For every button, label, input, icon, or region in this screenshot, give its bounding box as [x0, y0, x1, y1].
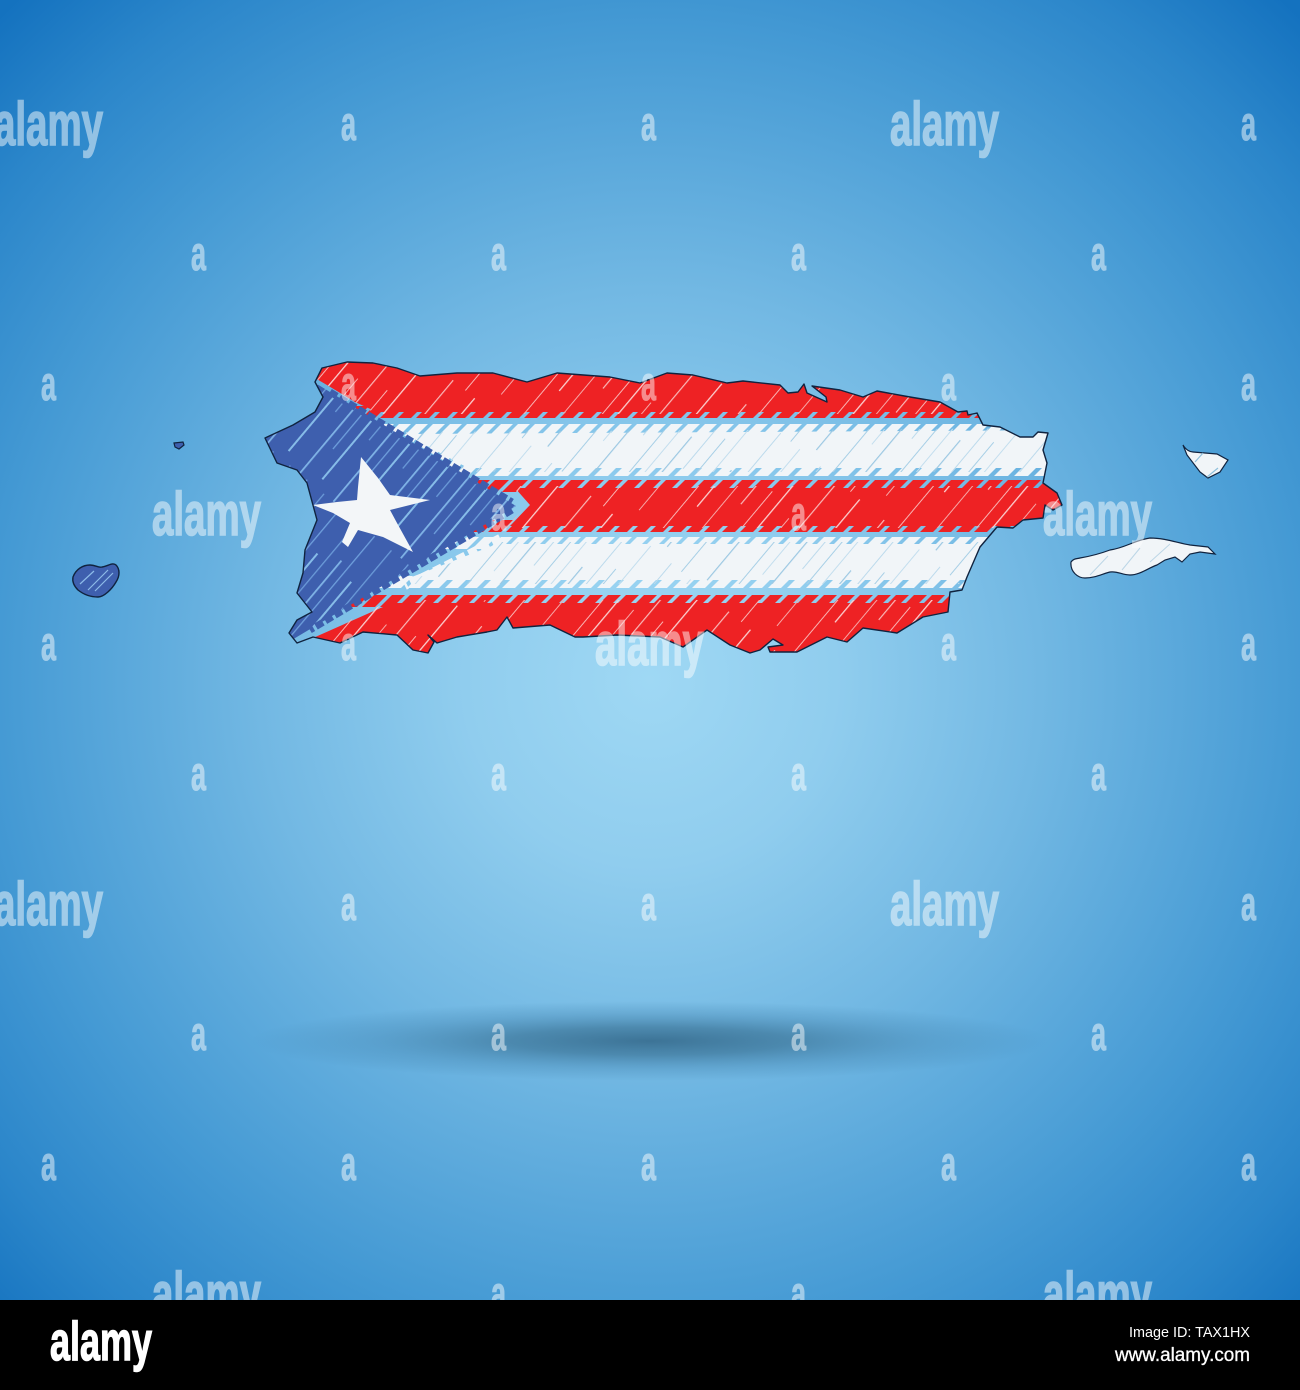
image id: Image ID: TAX1HX	[1129, 1324, 1250, 1341]
stock-photo watermark grid: a	[791, 228, 806, 281]
floating shadow below map	[250, 1001, 1050, 1081]
website: www.alamy.com	[1114, 1345, 1250, 1366]
Monito islet	[174, 442, 184, 449]
stock-photo watermark grid: a	[491, 228, 506, 281]
stock-photo watermark grid: a	[791, 1008, 806, 1061]
Vieques island	[1071, 538, 1215, 578]
stock-photo watermark grid: a	[1241, 878, 1256, 931]
stock-photo watermark grid: a	[1091, 748, 1106, 801]
stock-photo watermark grid: a	[341, 618, 356, 671]
stock-photo watermark grid: a	[1091, 228, 1106, 281]
map: main island of Puerto Rico with scribbled flag	[264, 361, 1063, 654]
stock-photo watermark grid: alamy	[1043, 1260, 1152, 1328]
stock-photo watermark grid: alamy	[595, 610, 704, 678]
stock-photo watermark grid: alamy	[152, 480, 261, 548]
stock-photo watermark grid: alamy	[890, 870, 999, 938]
stock-photo watermark grid: a	[41, 618, 56, 671]
Culebra island	[1183, 445, 1228, 478]
island outline	[265, 362, 1062, 653]
bottom red stripe	[316, 595, 949, 652]
stock-photo watermark grid: a	[191, 748, 206, 801]
stock-photo watermark grid: a	[491, 1008, 506, 1061]
stock-photo watermark grid: a	[341, 358, 356, 411]
stock-photo watermark grid: a	[641, 1138, 656, 1191]
stock-photo watermark grid: a	[1241, 618, 1256, 671]
stock-photo watermark grid: a	[1241, 1138, 1256, 1191]
stock-photo watermark grid: a	[791, 488, 806, 541]
stock-photo watermark grid: alamy	[890, 90, 999, 158]
stock-photo watermark grid: a	[1091, 1008, 1106, 1061]
stock-photo watermark grid: a	[791, 748, 806, 801]
stock-photo watermark grid: a	[941, 358, 956, 411]
stock-photo watermark grid: a	[191, 1008, 206, 1061]
stock-photo watermark grid: a	[941, 618, 956, 671]
stock-photo watermark grid: a	[341, 1138, 356, 1191]
stock-photo watermark grid: a	[341, 878, 356, 931]
stock-photo watermark grid: a	[641, 358, 656, 411]
stock-photo watermark grid: a	[791, 1268, 806, 1321]
stock-photo watermark grid: a	[491, 1268, 506, 1321]
blue triangle	[266, 384, 516, 638]
middle red stripe	[474, 480, 1062, 532]
stock-photo watermark grid: a	[191, 228, 206, 281]
stock-photo watermark grid: a	[41, 358, 56, 411]
white star	[313, 457, 430, 552]
stock-photo watermark grid: a	[491, 748, 506, 801]
stock-photo watermark grid: a	[491, 488, 506, 541]
footer logo: alamy	[50, 1310, 152, 1372]
stock-photo watermark grid: alamy	[152, 1260, 261, 1328]
footer bar	[0, 1300, 1300, 1390]
Mona island	[73, 564, 119, 597]
lower white stripe	[379, 534, 988, 590]
stock-photo watermark grid: a	[1241, 98, 1256, 151]
stock-photo watermark grid: alamy	[1043, 480, 1152, 548]
stock-photo watermark grid: a	[41, 1138, 56, 1191]
stock-photo watermark grid: a	[641, 98, 656, 151]
upper white stripe	[384, 424, 1048, 476]
stock-photo watermark grid: a	[641, 878, 656, 931]
stock-photo watermark grid: a	[1241, 358, 1256, 411]
stock-photo watermark grid: a	[341, 98, 356, 151]
stock-photo watermark grid: a	[941, 1138, 956, 1191]
top red stripe	[317, 362, 979, 418]
